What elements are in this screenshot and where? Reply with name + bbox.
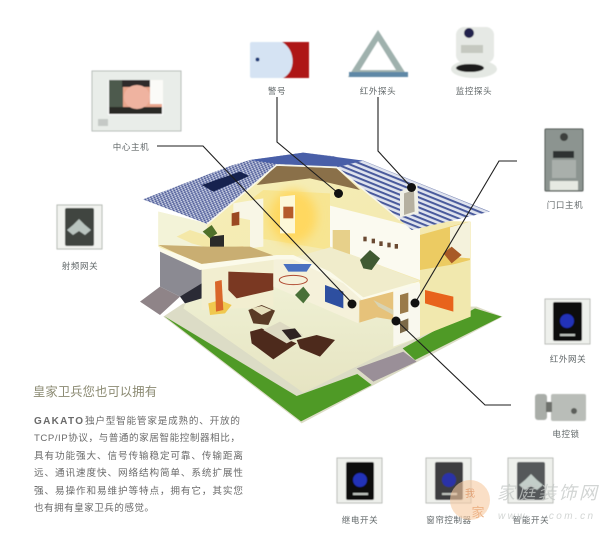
- interior walls: [158, 165, 471, 337]
- label: alarm: 警号: [268, 86, 286, 96]
- label: curtain controller: 窗帘控制器: [426, 515, 472, 525]
- text block: description: 独户型智能管家是成熟的、开放的: [85, 415, 240, 427]
- device: infrared gateway: [545, 299, 590, 344]
- label: smart switch: 智能开关: [513, 515, 549, 525]
- text block: description: 强、易操作和易维护等特点，拥有它，其实您: [34, 485, 243, 497]
- connector lines and markers: [157, 97, 517, 405]
- text block: description: 也有拥有皇家卫兵的感觉。: [34, 502, 154, 514]
- watermark text: 家庭装饰网: [497, 483, 599, 503]
- watermark: [450, 480, 599, 522]
- text block: description: 远、通讯速度快、网络结构简单、系统扩展性: [34, 467, 243, 479]
- watermark logo: 家: [471, 505, 485, 520]
- text block: description: 具有功能强大、信号传输稳定可靠、传输距离: [34, 450, 243, 462]
- device: relay switch: [337, 458, 382, 503]
- text block: description: TCP/IP协议，与普通的家居智能控制器相比，: [34, 432, 240, 444]
- label: RF gateway: 射频网关: [62, 261, 98, 271]
- device: alarm: [250, 42, 309, 78]
- device: infrared probe: [348, 30, 408, 77]
- house illustration: [140, 153, 503, 423]
- device: electric lock: [535, 394, 586, 421]
- watermark url: www. .com.cn: [498, 511, 593, 522]
- furniture: [203, 225, 462, 359]
- label: infrared probe: 红外探头: [360, 86, 396, 96]
- label: infrared gateway: 红外网关: [550, 354, 586, 364]
- text block: description: GAKATO: [34, 416, 83, 427]
- device: RF gateway: [57, 205, 102, 249]
- device: door unit: [545, 129, 583, 191]
- label: electric lock: 电控锁: [552, 429, 580, 439]
- device: camera: [451, 27, 497, 78]
- line: door unit: [415, 161, 517, 303]
- line: alarm: [277, 97, 338, 193]
- line: infrared probe: [378, 97, 411, 187]
- line: electric lock: [396, 320, 511, 405]
- line: central host: [157, 146, 352, 303]
- lot and lawn: [140, 287, 503, 423]
- device: smart switch: [508, 458, 553, 503]
- text block: description: [34, 415, 243, 514]
- device: curtain controller: [426, 458, 471, 503]
- stair and pillar: [359, 283, 420, 347]
- label: relay switch: 继电开关: [342, 515, 378, 525]
- upper floor slab: [158, 245, 419, 301]
- label: door unit: 门口主机: [547, 200, 583, 210]
- watermark logo: [450, 480, 490, 520]
- device: central host: [92, 71, 181, 131]
- label: camera: 监控探头: [456, 86, 492, 96]
- roof: [143, 153, 490, 230]
- text block: heading: 皇家卫兵您也可以拥有: [33, 384, 157, 399]
- marker dots: [334, 183, 420, 326]
- label: central host: 中心主机: [113, 142, 149, 152]
- ground floor: [183, 268, 420, 393]
- watermark logo: 我: [465, 488, 475, 500]
